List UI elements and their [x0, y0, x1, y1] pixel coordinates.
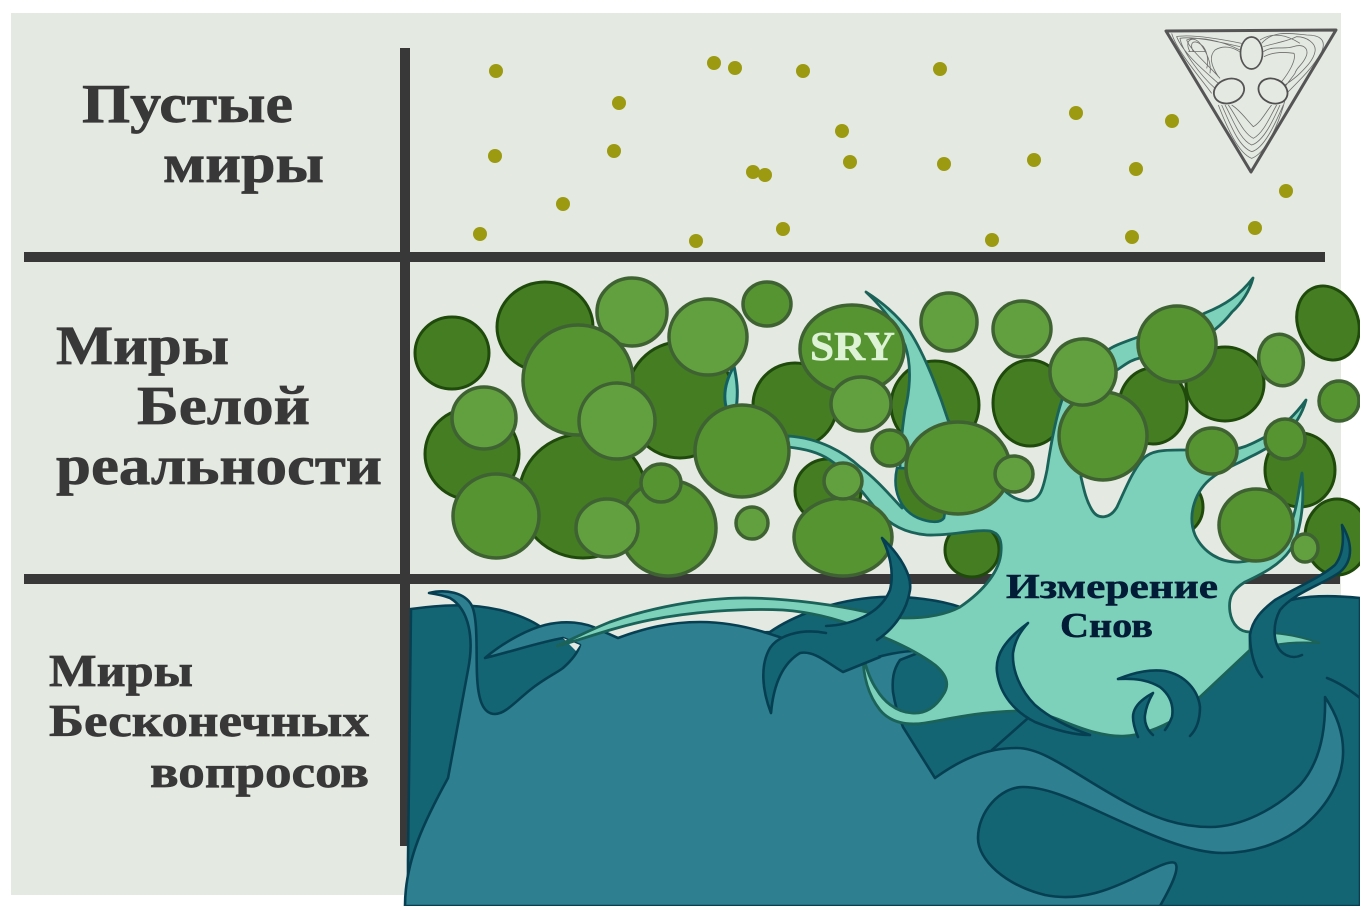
label: dream dimension: Измерение — [1006, 567, 1218, 606]
label: dream dimension — [1006, 567, 1218, 645]
gap in front layer — [563, 638, 580, 651]
dark green worlds — [415, 277, 1360, 577]
dark back layer: endless questions — [408, 596, 1360, 906]
thorn: left hook at curl — [763, 538, 910, 713]
mint sliver on dark layer — [1272, 633, 1320, 645]
heading: worlds of endless questions: Бесконечных — [49, 695, 369, 746]
heading: worlds of white reality: Белой — [137, 375, 310, 436]
thorn: double hook — [1118, 670, 1200, 737]
heading: empty worlds — [82, 73, 324, 194]
thorn: right hook — [1250, 525, 1350, 677]
scattered dots: empty worlds — [473, 56, 1293, 248]
heading: empty worlds: миры — [163, 133, 324, 194]
medium and light green worlds — [452, 278, 1359, 576]
heading: worlds of endless questions: вопросов — [150, 746, 369, 797]
thorn: central hook — [997, 623, 1090, 735]
heading: worlds of white reality: реальности — [56, 435, 382, 496]
heading: worlds of endless questions — [49, 645, 369, 797]
inner line of dark region — [992, 678, 1360, 750]
light front layer: endless questions — [405, 591, 1343, 906]
heading: empty worlds: Пустые — [82, 73, 293, 134]
dark green world over dream tendril — [896, 468, 952, 522]
heading: worlds of endless questions: Миры — [49, 645, 193, 696]
label: SRY: SRY — [810, 323, 895, 369]
mint teal strip behind circles — [725, 366, 737, 410]
heading: worlds of white reality — [56, 315, 382, 496]
label: dream dimension: Снов — [1060, 606, 1153, 645]
heading: worlds of white reality: Миры — [56, 315, 229, 376]
icon: triangle emblem — [1166, 30, 1336, 172]
dream dimension: mint shape with tendrils — [557, 278, 1306, 736]
